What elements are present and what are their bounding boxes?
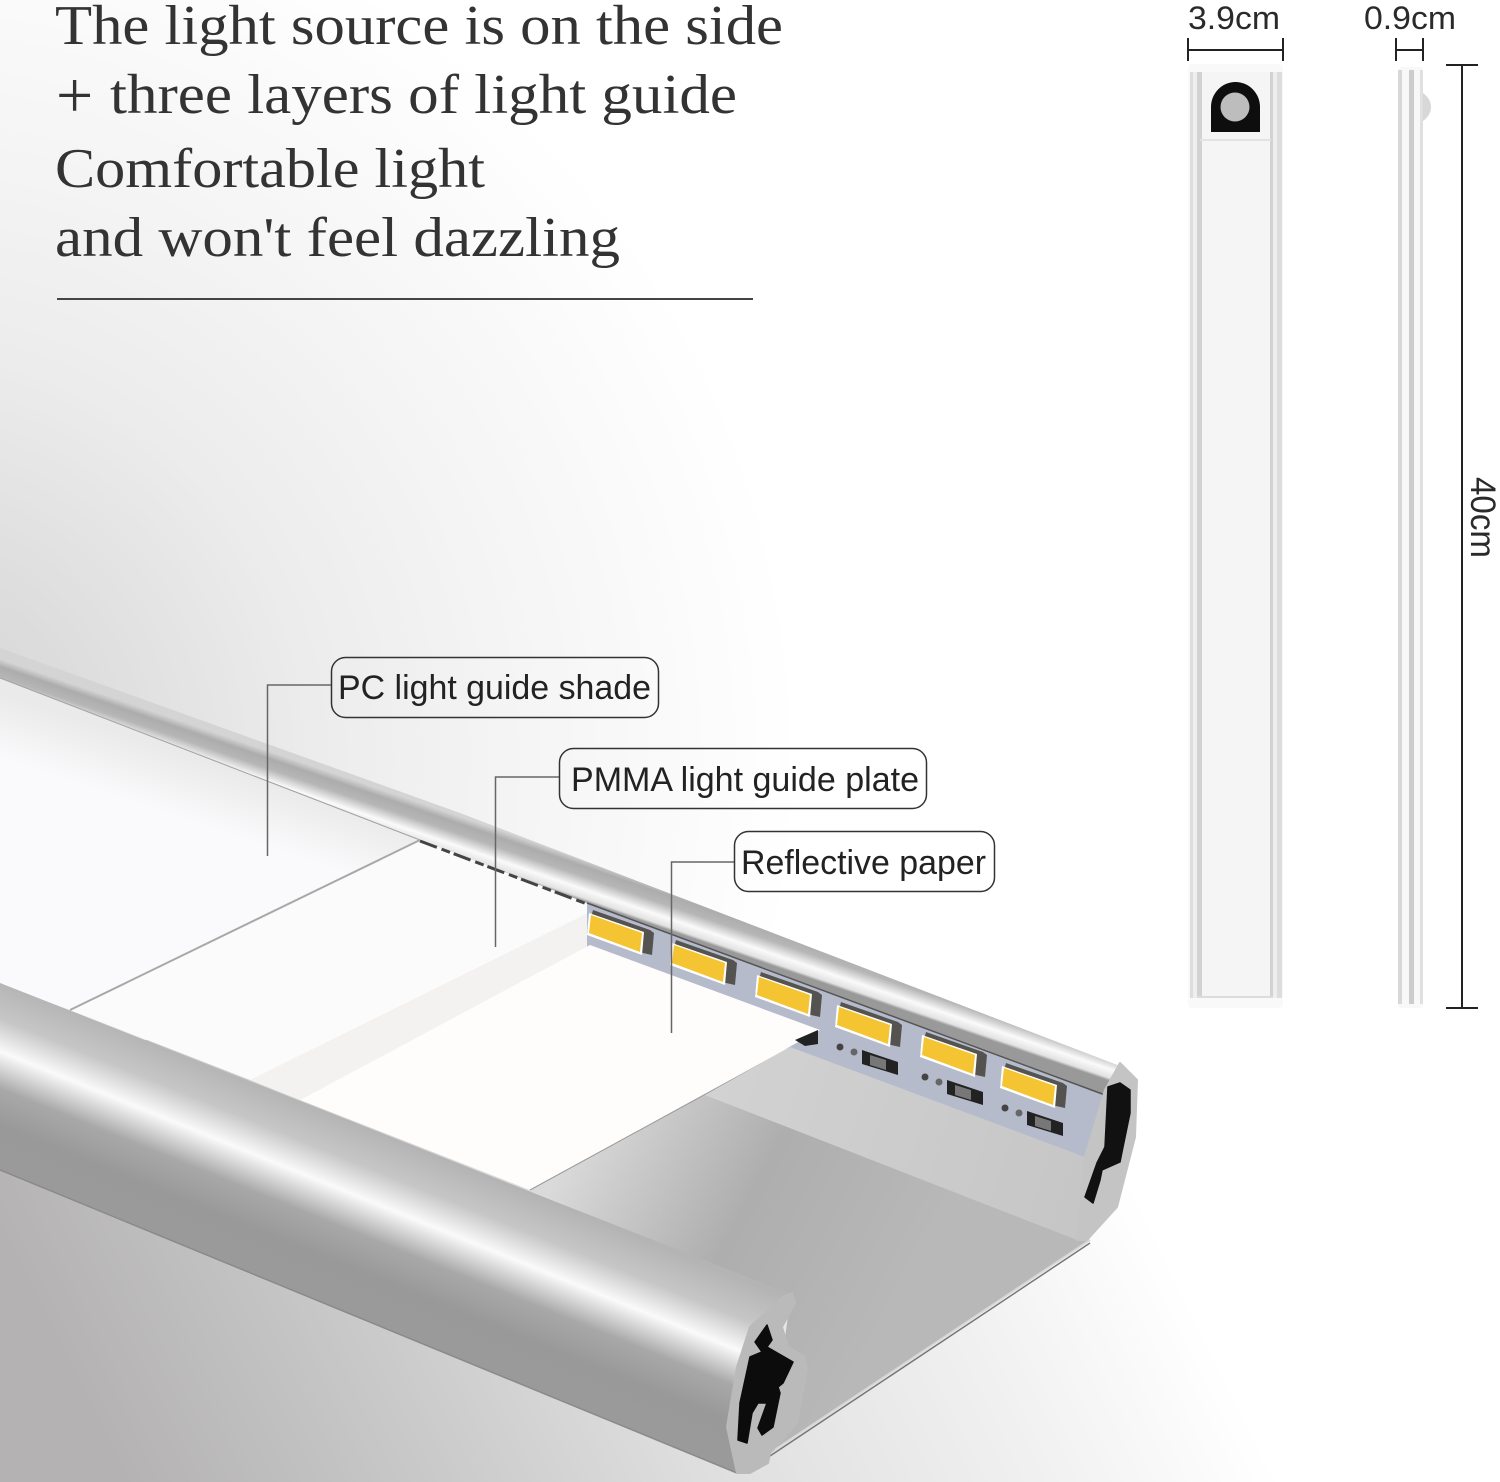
callout: Reflective paper [672, 832, 994, 1033]
front rail end cap [727, 1293, 807, 1473]
PC light guide shade panel [0, 678, 420, 1010]
heading: Comfortable light [55, 138, 485, 200]
back aluminium rail [0, 648, 1120, 1095]
reflective paper panel [300, 945, 820, 1190]
callout: PC light guide shade [268, 658, 658, 856]
dimension: width 3.9cm [1188, 0, 1283, 61]
heading: three layers of light guide [110, 64, 737, 126]
front aluminium rail [0, 983, 788, 1473]
inner ridge [705, 1047, 1085, 1240]
circuit board strip [587, 903, 1105, 1160]
icon: motion sensor [1211, 82, 1260, 132]
back rail end cap [1077, 1063, 1137, 1240]
front view of light bar [1188, 64, 1283, 1008]
callout: Reflective paper: Reflective paper [741, 844, 986, 882]
callout: PMMA light guide plate [496, 748, 926, 947]
lower housing plate [530, 1048, 1090, 1456]
dimension: length 40cm [1446, 65, 1500, 1008]
heading: and won't feel dazzling [55, 207, 620, 269]
dimension: depth 0.9cm [1364, 0, 1456, 61]
callout: PC light guide shade: PC light guide shade [338, 669, 651, 707]
dimension: width 3.9cm: 3.9cm [1188, 0, 1280, 36]
PMMA light guide plate panel [70, 840, 590, 1100]
product cutaway illustration [0, 648, 1137, 1473]
LED chips [587, 910, 1067, 1136]
heading [55, 0, 783, 269]
side view of light bar [1398, 67, 1431, 1008]
heading: + [56, 59, 93, 132]
dimension: depth 0.9cm: 0.9cm [1364, 0, 1456, 36]
callout: PMMA light guide plate: PMMA light guide plate [571, 761, 919, 799]
